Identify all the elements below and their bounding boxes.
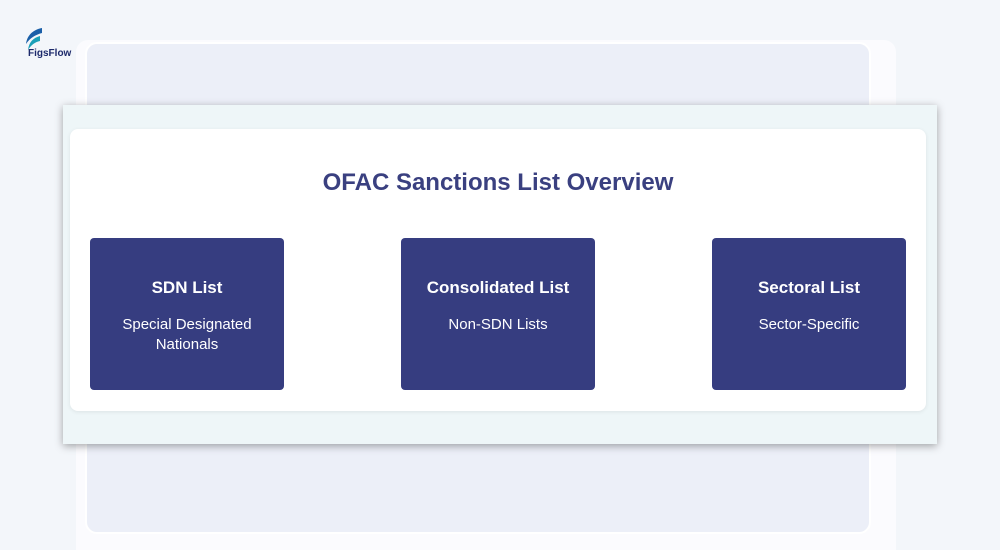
box: SDN List (90, 238, 284, 390)
background panel (85, 42, 871, 534)
white card (70, 129, 926, 411)
background frame (76, 40, 896, 550)
box: Consolidated List: Non-SDN Lists (448, 316, 548, 333)
box: SDN List: SDN List (152, 278, 222, 297)
title: OFAC Sanctions List Overview (323, 169, 673, 196)
box: Sectoral List (712, 238, 906, 390)
box: Sectoral List: Sectoral List (758, 278, 860, 297)
box: Sectoral List: Sector-Specific (759, 316, 859, 333)
box: Consolidated List: Consolidated List (427, 278, 569, 297)
main panel (63, 105, 937, 444)
logo (26, 28, 72, 59)
box: Consolidated List (401, 238, 595, 390)
logo: FigsFlow (28, 48, 71, 59)
box: SDN List: Special Designated Nationals (122, 316, 252, 353)
